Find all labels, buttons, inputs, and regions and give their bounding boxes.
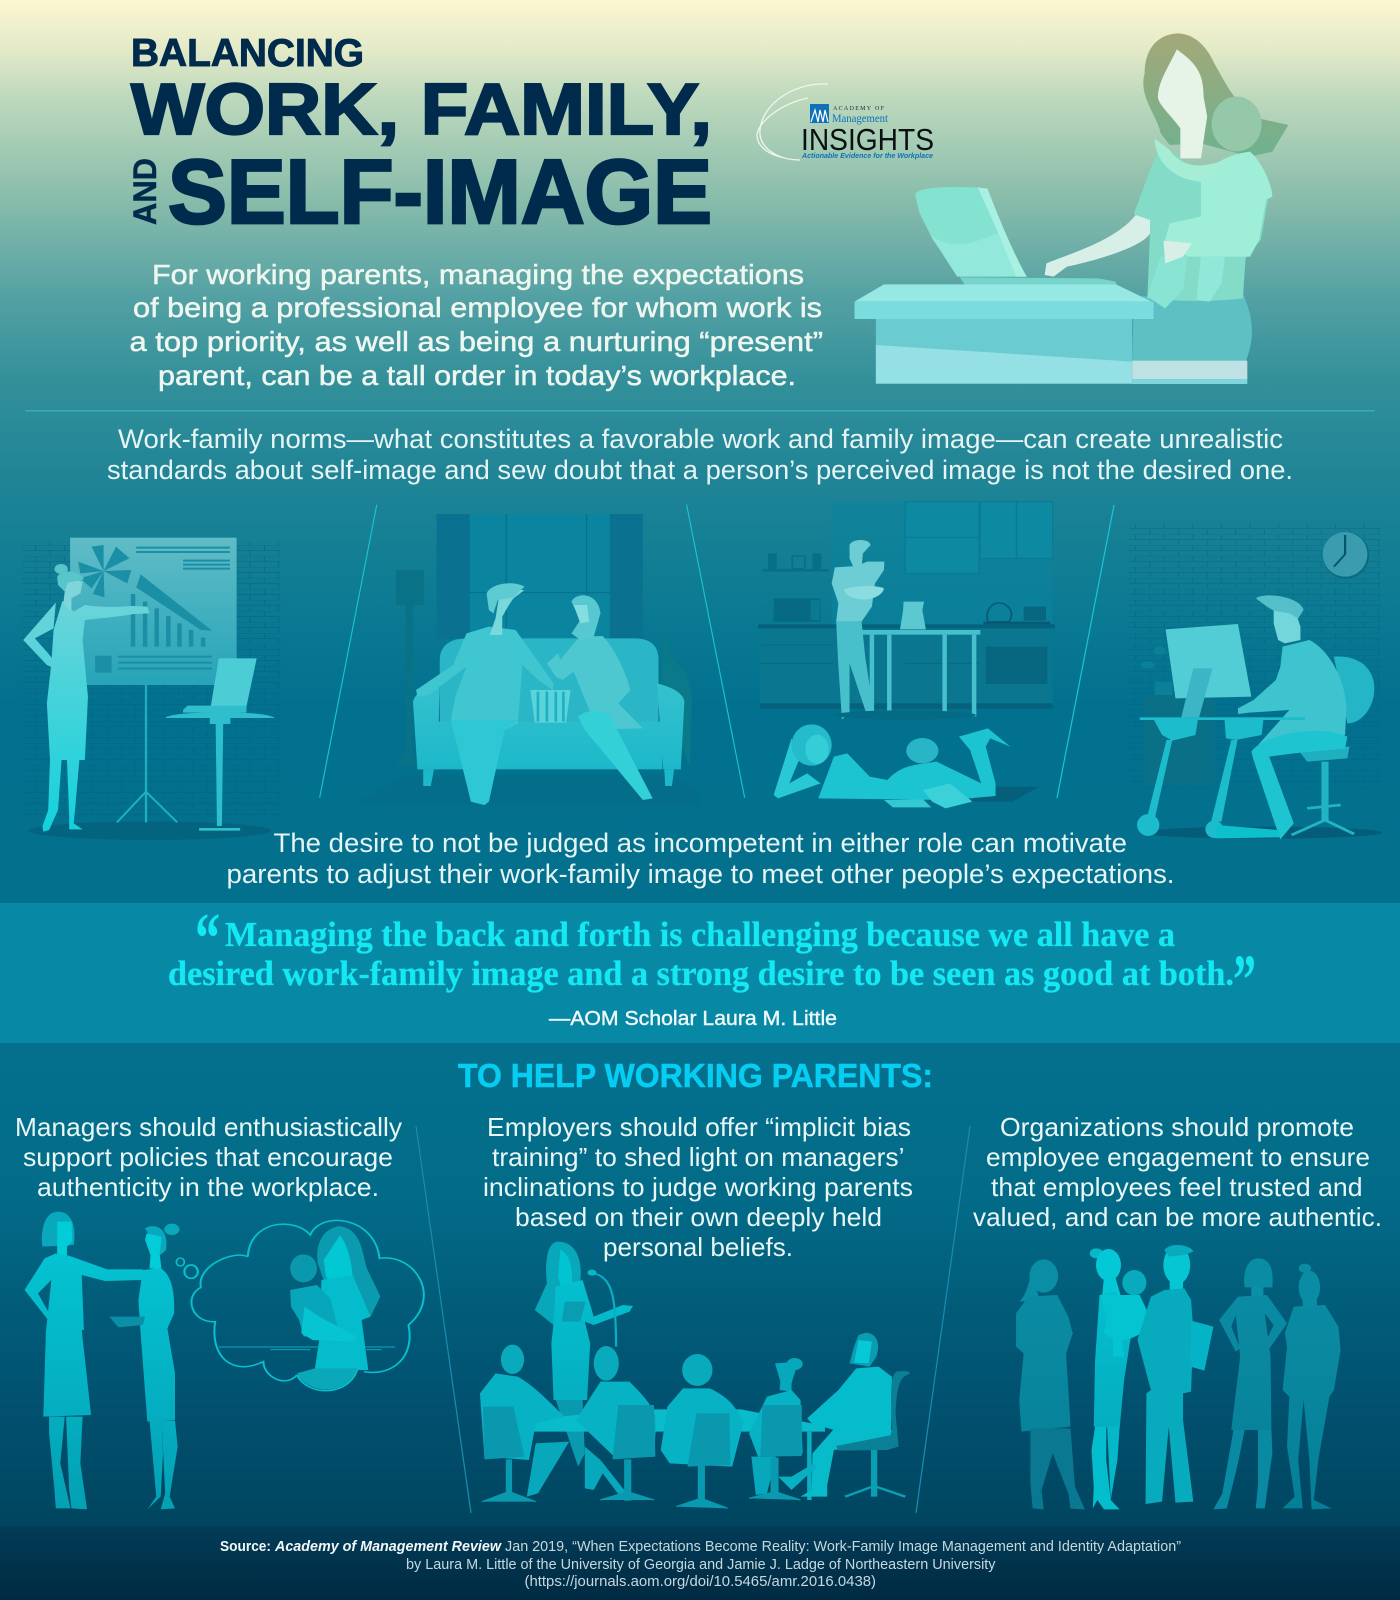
plant [661, 622, 692, 767]
intro line 1: For working parents, managing the expectations [152, 259, 804, 290]
floor shadow [28, 821, 271, 840]
heading: to help working parents: TO HELP WORKING PARENTS: [458, 1057, 933, 1094]
office chair [836, 1371, 910, 1497]
authors: by Laura M. Little of the University of Georgia and Jamie J. Ladge of Northeastern University [406, 1556, 996, 1573]
article title: Jan 2019, “When Expectations Become Reality: Work-Family Image Management and Identity Adaptation” [505, 1538, 1181, 1555]
logo text: insights: INSIGHTS [801, 122, 934, 157]
wall clock [1323, 532, 1369, 579]
journal name: Academy of Management Review [274, 1538, 502, 1555]
skirt [1132, 293, 1252, 362]
laptop on lectern [165, 658, 275, 831]
stool [1132, 361, 1247, 384]
illustration: training meeting, right side [749, 1245, 1341, 1509]
opening quotation mark: “ [195, 898, 220, 978]
scene divider [687, 505, 745, 798]
jar [900, 602, 926, 629]
kitchen table [862, 630, 980, 716]
group: man with short hair [1283, 1264, 1341, 1509]
man cooking [832, 540, 884, 719]
column 1 line 1: Managers should enthusiastically [15, 1112, 402, 1142]
title line: and, rotated: AND [127, 158, 163, 225]
scene: family in kitchen [758, 502, 1055, 808]
scene: man at computer [1129, 523, 1382, 839]
table leg [807, 1432, 812, 1500]
logo: Academy of Management Insights [757, 84, 934, 160]
side cabinet [1144, 695, 1215, 785]
chair 4 [749, 1405, 802, 1500]
scene divider [320, 505, 377, 798]
column 2 text [483, 1112, 913, 1262]
column 2 line 5: personal beliefs. [603, 1232, 793, 1262]
seated man 1 [480, 1345, 569, 1497]
popcorn bucket [530, 690, 571, 723]
rug [355, 776, 700, 805]
shelf with plants [763, 553, 829, 572]
floor lamp [395, 570, 424, 767]
computer monitor [1166, 624, 1251, 717]
woman face [1158, 49, 1207, 158]
thought cloud [191, 1220, 424, 1391]
intro line 4: parent, can be a tall order in today’s workplace. [158, 360, 796, 391]
paragraph: desire not to be judged [226, 828, 1174, 889]
quote band [0, 898, 1400, 1043]
child shirt [1165, 152, 1272, 257]
quote line 1: Managing the back and forth is challenging because we all have a [225, 915, 1175, 954]
source label: Source: [220, 1538, 271, 1555]
group: long-haired woman [1016, 1259, 1085, 1509]
chair 2 [600, 1405, 655, 1500]
upper cabinets [905, 502, 1053, 573]
woman on sofa [547, 595, 653, 800]
logo mark [810, 104, 829, 123]
chair [1292, 657, 1374, 835]
desire line 1: The desire to not be judged as incompetent in either role can motivate [274, 828, 1127, 858]
floor shadow [1143, 827, 1382, 839]
microwave [774, 598, 821, 622]
potted plant [1141, 647, 1172, 695]
left woman manager [25, 1212, 143, 1509]
desk [854, 284, 1154, 384]
illustration: training meeting [480, 1242, 825, 1508]
title line: work, family: WORK, FAMILY, [131, 70, 712, 150]
right woman employee [109, 1224, 179, 1509]
brick wall [22, 542, 280, 818]
microphone [588, 1270, 616, 1347]
board stand [117, 685, 177, 822]
presenter [535, 1242, 633, 1467]
child legs [1147, 257, 1225, 308]
desk [1137, 717, 1305, 838]
thought bubbles [176, 1258, 198, 1278]
scene: woman presenting [22, 505, 377, 840]
column 2 line 2: training” to shed light on managers’ [492, 1142, 904, 1172]
column 3 line 4: valued, and can be more authentic. [973, 1202, 1382, 1232]
scene divider [1057, 505, 1114, 798]
logo tagline: Actionable Evidence for the Workplace [801, 151, 933, 160]
child arm [1154, 138, 1232, 182]
footer [0, 1526, 1400, 1600]
table shadow [835, 710, 976, 720]
hero illustration: mother with child at laptop [854, 33, 1288, 384]
column 3 text [973, 1112, 1382, 1232]
kitchen counter and cabinets [758, 624, 1055, 709]
quote line 2: desired work-family image and a strong desire to be seen as good at both. [168, 954, 1234, 993]
band background [0, 903, 1400, 1043]
closing quotation mark: ” [1233, 940, 1256, 1020]
scene: couple on sofa [355, 505, 745, 805]
presentation board [70, 538, 237, 685]
norms line 1: Work-family norms—what constitutes a favorable work and family image—can create unrealistic [118, 424, 1283, 454]
seated bearded man [778, 1333, 892, 1497]
illustration: manager supporting employee [25, 1212, 424, 1509]
attribution: —AOM Scholar Laura M. Little [549, 1008, 837, 1030]
seated man 2 [576, 1346, 656, 1500]
column 3 line 1: Organizations should promote [1000, 1112, 1354, 1142]
column 1 text [15, 1112, 402, 1202]
woman torso [1134, 147, 1268, 301]
column 2 line 1: Employers should offer “implicit bias [487, 1112, 911, 1142]
presenter woman [23, 564, 150, 832]
group: tall man with folder [1138, 1245, 1213, 1504]
footer background [0, 1526, 1400, 1600]
man on sofa [416, 583, 554, 805]
kitchen wall wash [832, 502, 1053, 625]
title line: self-image: SELF-IMAGE [168, 142, 712, 243]
window and curtains [437, 514, 643, 639]
column 3 line 2: employee engagement to ensure [986, 1142, 1370, 1172]
column 3 line 3: that employees feel trusted and [991, 1172, 1362, 1202]
brick wall [1129, 523, 1381, 790]
seated woman [749, 1358, 803, 1495]
group: mother holding child [1090, 1248, 1148, 1509]
column 2 line 3: inclinations to judge working parents [483, 1172, 913, 1202]
mother and child on floor [774, 724, 1039, 808]
mother and baby in thought [290, 1226, 380, 1390]
ground line in thought [219, 1347, 395, 1350]
woman arm and hand [1045, 215, 1192, 277]
article url: (https://journals.aom.org/doi/10.5465/amr.2016.0438) [524, 1573, 876, 1590]
seated man 3 [661, 1354, 743, 1467]
chair 1 [482, 1407, 536, 1502]
norms line 2: standards about self-image and sew doubt that a person’s perceived image is not the desired one. [107, 455, 1293, 485]
oven and stove [983, 603, 1050, 684]
intro line 2: of being a professional employee for whom work is [133, 292, 822, 323]
title line: balancing: BALANCING [131, 32, 364, 75]
logo swoosh [757, 84, 828, 160]
child head [1212, 97, 1262, 151]
intro paragraph [130, 259, 823, 391]
column 1 line 2: support policies that encourage [23, 1142, 393, 1172]
chair 3 [676, 1413, 730, 1508]
title [127, 32, 712, 243]
column 1 line 3: authenticity in the workplace. [37, 1172, 379, 1202]
hair [1143, 33, 1288, 157]
intro line 3: a top priority, as well as being a nurturing “present” [130, 326, 823, 357]
logo text: academy of: ACADEMY OF [833, 106, 885, 112]
desire line 2: parents to adjust their work-family image to meet other people’s expectations. [226, 859, 1174, 889]
man at desk [1238, 595, 1347, 839]
paragraph: work-family norms [107, 424, 1293, 485]
meeting table [531, 1409, 825, 1432]
sofa [413, 638, 684, 786]
laptop [915, 187, 1121, 295]
column 2 line 4: based on their own deeply held [515, 1202, 882, 1232]
group: woman with hands on hips [1213, 1258, 1287, 1509]
logo text: management: Management [832, 111, 889, 125]
